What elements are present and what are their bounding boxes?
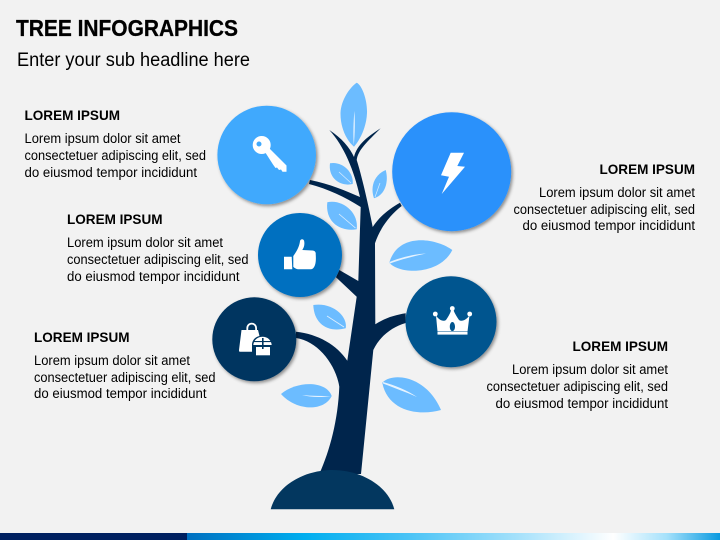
text block: bottom right: do eiusmod tempor incididunt — [496, 396, 668, 411]
leaf: upper left — [330, 163, 353, 185]
text block: top left: LOREM IPSUM — [24, 107, 120, 123]
leaf: upper right — [372, 170, 387, 198]
icon: key — [253, 136, 286, 172]
text block: top right: consectetuer adipiscing elit, sed — [514, 202, 695, 217]
circle: shopping bag — [212, 297, 296, 381]
leaf: middle left — [327, 202, 357, 230]
leaf: bottom right — [382, 377, 441, 412]
leaves — [281, 83, 452, 412]
icon: bag and gift box — [239, 324, 272, 355]
tree trunk and branches — [296, 128, 406, 474]
text block: bottom right: Lorem ipsum dolor sit amet — [512, 362, 668, 377]
text block: middle left — [67, 211, 248, 284]
text block: top left: consectetuer adipiscing elit, sed — [24, 148, 206, 163]
text block: middle left: consectetuer adipiscing elit, sed — [67, 252, 248, 267]
text block: top left: do eiusmod tempor incididunt — [24, 165, 197, 180]
leaf: lower left — [313, 305, 346, 330]
text block: bottom right: LOREM IPSUM — [572, 338, 668, 354]
text block: bottom left: LOREM IPSUM — [34, 329, 130, 345]
leaf: bottom left — [281, 384, 332, 407]
text block: top left — [24, 107, 206, 180]
icon: thumbs up — [284, 239, 316, 269]
text block: bottom right — [486, 338, 668, 411]
text block: middle left: Lorem ipsum dolor sit amet — [67, 235, 223, 250]
leaf: top — [340, 83, 367, 147]
circle: key — [217, 106, 316, 204]
icon: crown — [433, 306, 472, 335]
icon: lightning bolt — [441, 153, 465, 194]
circle: crown — [406, 276, 496, 367]
text block: top right: do eiusmod tempor incididunt — [522, 218, 695, 233]
footer gradient bar — [0, 533, 720, 540]
text block: bottom left: Lorem ipsum dolor sit amet — [34, 353, 190, 368]
text block: bottom right: consectetuer adipiscing elit, sed — [486, 379, 668, 394]
text block: bottom left: consectetuer adipiscing elit, sed — [34, 370, 216, 385]
text block: top right — [514, 161, 695, 233]
text block: top left: Lorem ipsum dolor sit amet — [24, 131, 181, 146]
circle: thumbs up — [258, 213, 342, 297]
text block: top right: LOREM IPSUM — [600, 161, 695, 177]
title: TREE INFOGRAPHICS — [16, 15, 238, 41]
mound — [271, 470, 394, 509]
sub headline: Enter your sub headline here — [17, 50, 250, 71]
text block: bottom left — [34, 329, 216, 401]
text block: bottom left: do eiusmod tempor incididunt — [34, 386, 207, 401]
text block: top right: Lorem ipsum dolor sit amet — [539, 185, 695, 200]
leaf: middle right — [389, 240, 452, 271]
text block: middle left: LOREM IPSUM — [67, 211, 162, 227]
circle: lightning — [392, 112, 511, 231]
text block: middle left: do eiusmod tempor incididunt — [67, 269, 240, 284]
